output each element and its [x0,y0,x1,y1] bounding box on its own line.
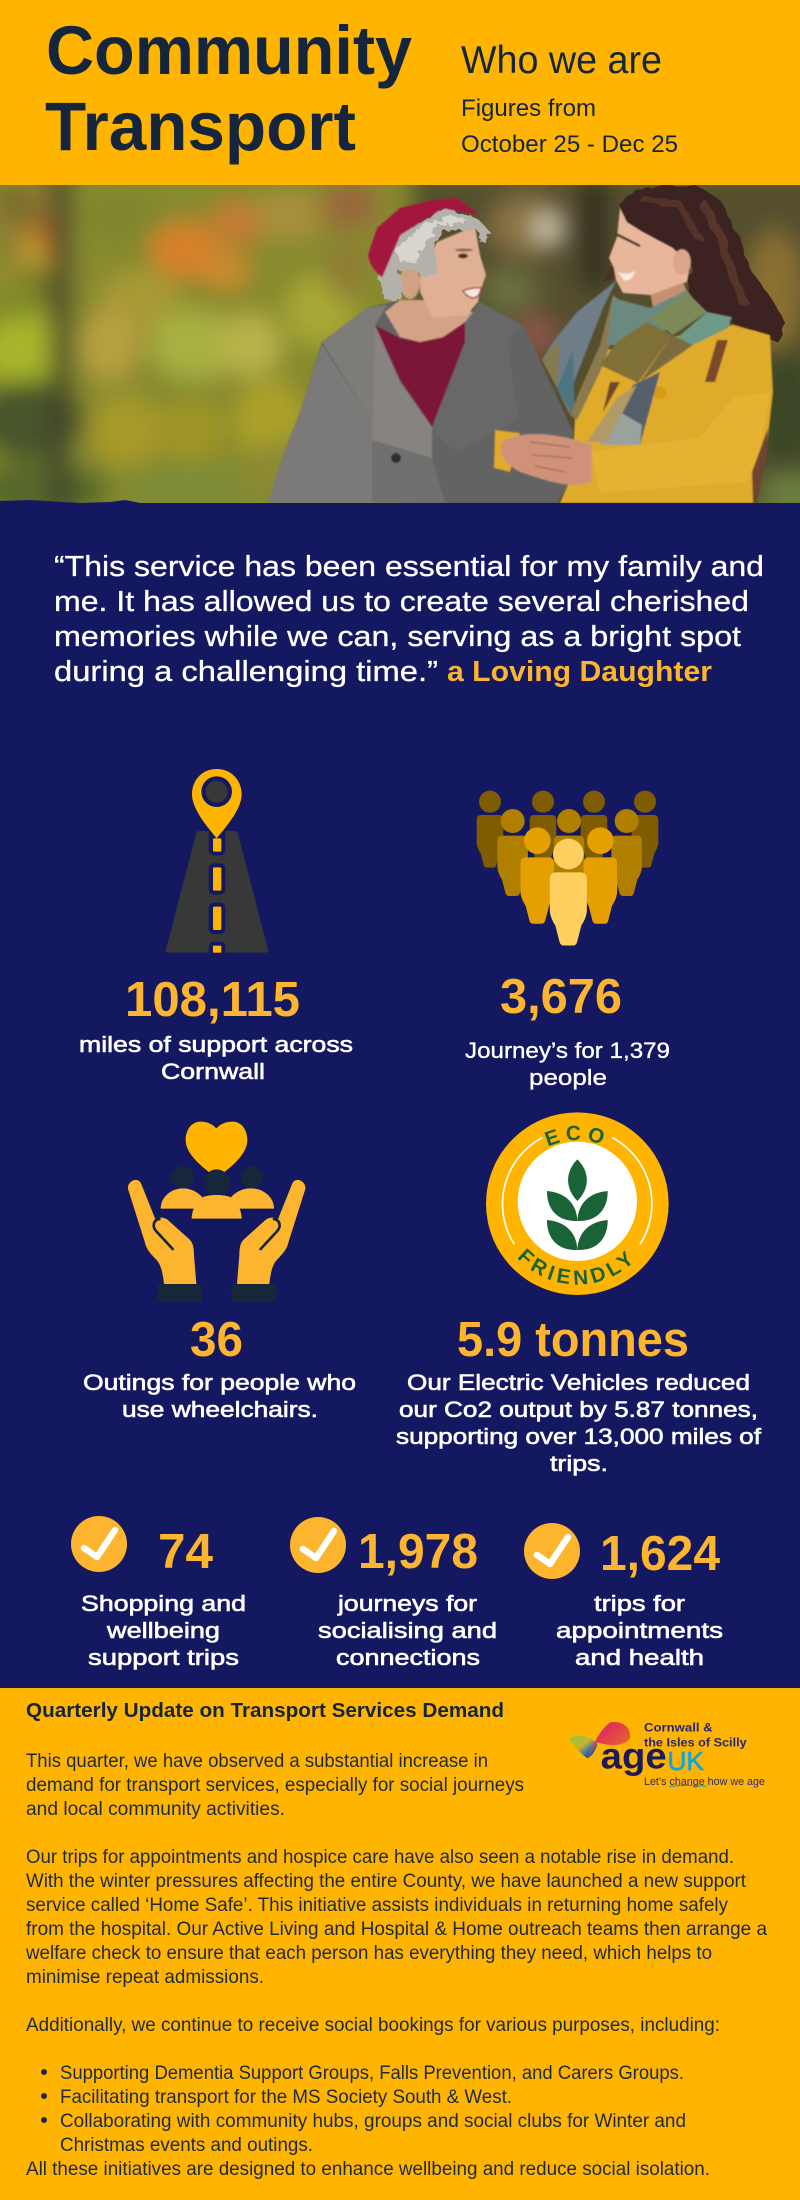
testimonial quote: me. It has allowed us to create several cherished [54,586,749,618]
older woman: beret [368,198,480,277]
paragraph 3: Additionally, we continue to receive social bookings for various purposes, including: [26,2015,720,2036]
younger woman: bag strap [705,340,728,382]
bullet list: Christmas events and outings. [60,2135,313,2156]
caption: support trips [88,1645,239,1670]
caption: socialising and [318,1618,497,1643]
paragraph 1: demand for transport services, especially for social journeys [26,1775,524,1796]
caption: Journey’s for 1,379 [465,1038,670,1063]
older woman: curly grey hair [378,208,493,303]
older woman: sweater [375,322,465,427]
testimonial quote [54,551,764,688]
date range [461,95,678,158]
paragraph 2: With the winter pressures affecting the entire County, we have launched a new support [26,1871,747,1892]
logo: Age UK Cornwall: age [601,1734,667,1776]
number: 5.9 tonnes [457,1313,689,1367]
icon: check mark [524,1523,580,1579]
panel: quarterly update [0,1688,800,2200]
bullet list: Facilitating transport for the MS Society South & West. [60,2087,512,2108]
logo: Age UK Cornwall: the Isles of Scilly [644,1736,747,1750]
caption [396,1370,762,1476]
bullet list: Collaborating with community hubs, groups and social clubs for Winter and [60,2111,686,2132]
younger woman: scarf [542,280,617,415]
icon: road with location pin [166,769,268,953]
caption: miles of support across [79,1032,353,1057]
caption [83,1370,356,1422]
stat: 5.9 tonnes [396,1112,762,1476]
logo: Age UK Cornwall: UK [667,1746,705,1776]
younger woman: wavy hair [620,183,787,342]
caption: Outings for people who [83,1370,356,1395]
caption [79,1032,353,1084]
subtitle: who we are: Who we are [461,39,662,82]
caption: connections [336,1645,480,1670]
testimonial quote: during a challenging time.” [54,656,438,688]
icon: eco friendly badge: ECO [544,1126,604,1146]
caption: our Co2 output by 5.87 tonnes, [399,1397,758,1422]
icon: check mark [71,1516,127,1572]
date range: October 25 - Dec 25 [461,131,678,158]
caption: and health [575,1645,704,1670]
testimonial quote: “This service has been essential for my family and [54,551,764,583]
caption: Shopping and [81,1591,246,1616]
younger woman: yellow coat [560,325,773,503]
torn navy edge [0,500,140,503]
stat: 36 outings [83,1122,356,1422]
title: Community [46,12,412,89]
paragraph 2: service called ‘Home Safe’. This initiative assists individuals in returning home safely [26,1895,728,1916]
logo: Age UK Cornwall: Let’s change how we age [644,1776,765,1788]
caption [556,1591,723,1670]
caption: wellbeing [106,1618,220,1643]
caption: Cornwall [161,1059,265,1084]
caption: appointments [556,1618,723,1643]
caption [81,1591,246,1670]
icon: check mark [290,1517,346,1573]
panel: header [0,0,800,186]
stat: 1,978 social journeys [290,1517,497,1670]
testimonial quote: memories while we can, serving as a bright spot [54,621,741,653]
testimonial quote: a Loving Daughter [447,656,712,688]
older woman: coat [306,300,574,503]
closing sentence: All these initiatives are designed to enhance wellbeing and reduce social isolation. [26,2159,710,2180]
caption: people [529,1065,607,1090]
icon: hands holding people and heart [128,1122,305,1302]
title: Transport [45,88,356,165]
caption: supporting over 13,000 miles of [396,1424,762,1449]
caption: trips for [594,1591,685,1616]
paragraph 2 [25,1847,767,1988]
paragraph 1: This quarter, we have observed a substantial increase in [26,1751,488,1772]
number: 108,115 [125,973,300,1027]
stat: 74 shopping trips [71,1516,246,1670]
heading: Quarterly Update on Transport Services Demand [26,1700,504,1722]
paragraph 1: and local community activities. [26,1799,285,1820]
clasped hands [494,430,520,472]
younger woman: neck and face [650,282,687,308]
caption: journeys for [337,1591,477,1616]
paragraph 1 [26,1751,524,1820]
stat: 108,115 miles [79,769,353,1084]
paragraph 2: from the hospital. Our Active Living and Hospital & Home outreach teams then arrange a [26,1919,767,1940]
title [45,12,412,165]
icon: crowd of people [477,791,658,946]
icon: eco friendly badge: FRIENDLY [518,1248,631,1285]
older woman: neck and face [385,300,473,342]
paragraph 2: welfare check to ensure that each person has everything they need, which helps to [25,1943,712,1964]
date range: Figures from [461,95,596,122]
logo: Age UK Cornwall [569,1721,765,1788]
icon: eco friendly badge [486,1112,669,1295]
stat: 3,676 journeys [465,791,670,1090]
bullet list: Supporting Dementia Support Groups, Falls Prevention, and Carers Groups. [60,2063,684,2084]
caption: Our Electric Vehicles reduced [407,1370,750,1395]
bullet list [41,2063,686,2156]
number: 3,676 [500,970,622,1024]
caption: use wheelchairs. [122,1397,318,1422]
logo: Age UK Cornwall: Cornwall & [644,1721,713,1735]
caption: trips. [550,1451,608,1476]
photo: older woman and younger woman walking arm in arm in autumn park [0,185,800,503]
paragraph 2: minimise repeat admissions. [26,1967,264,1988]
paragraph 2: Our trips for appointments and hospice care have also seen a notable rise in demand. [26,1847,734,1868]
number: 1,624 [600,1527,720,1581]
caption [318,1591,497,1670]
caption [465,1038,670,1090]
stat: 1,624 appointment trips [524,1523,723,1670]
number: 74 [158,1525,213,1579]
number: 1,978 [358,1525,478,1579]
number: 36 [190,1313,243,1367]
